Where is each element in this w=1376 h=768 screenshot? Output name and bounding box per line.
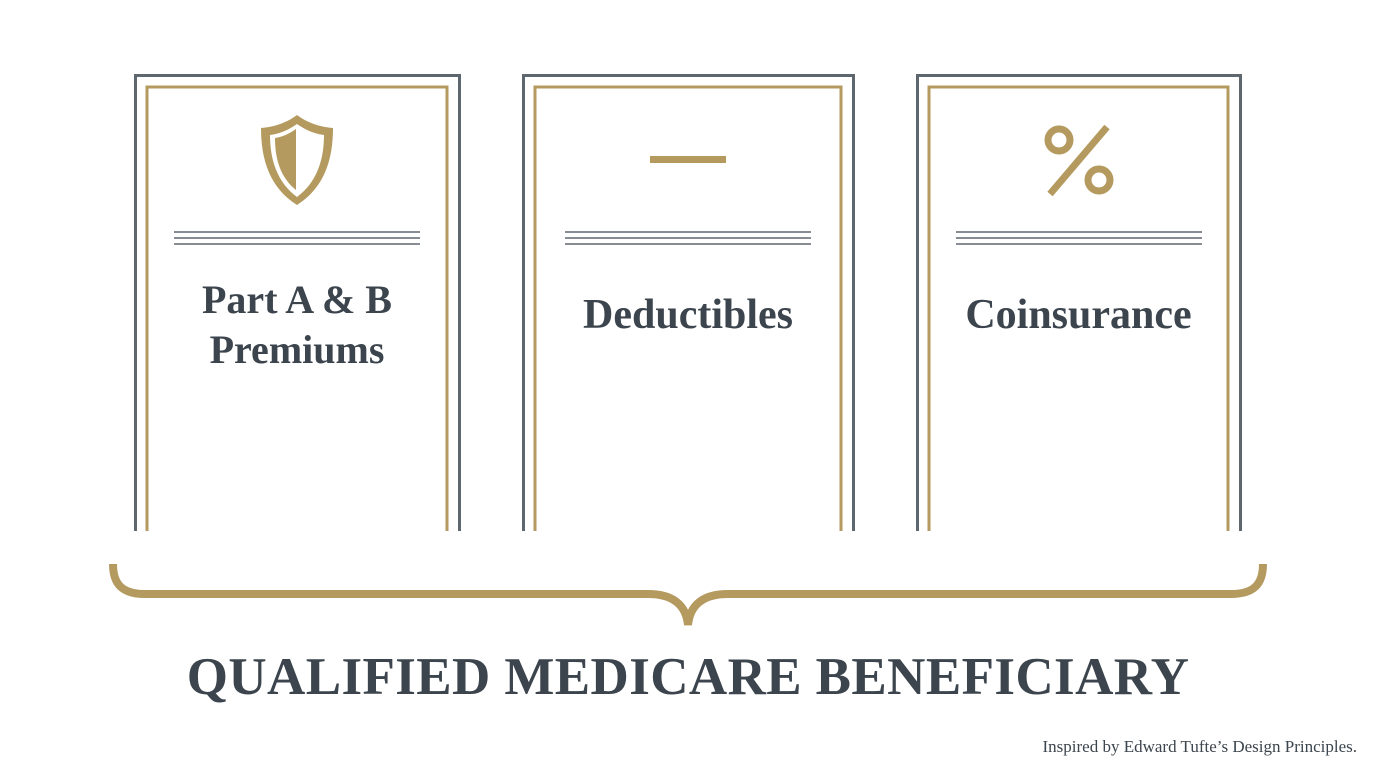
title: QUALIFIED MEDICARE BENEFICIARY bbox=[187, 648, 1189, 706]
heading: part a & b premiums bbox=[202, 277, 392, 372]
icon: minus bbox=[650, 156, 726, 163]
heading: deductibles: Deductibles bbox=[583, 292, 793, 338]
panel: coinsurance bbox=[918, 76, 1240, 531]
heading: part a & b premiums: Premiums bbox=[210, 327, 384, 372]
icon: percent bbox=[1048, 127, 1110, 194]
panel: premiums bbox=[136, 76, 460, 531]
brace bbox=[113, 564, 1263, 625]
panel: deductibles bbox=[524, 76, 854, 531]
heading: part a & b premiums: Part A & B bbox=[202, 277, 392, 322]
heading: coinsurance: Coinsurance bbox=[965, 292, 1192, 338]
icon: shield bbox=[261, 115, 333, 205]
footer credit: Inspired by Edward Tufte’s Design Principles. bbox=[1043, 737, 1357, 756]
